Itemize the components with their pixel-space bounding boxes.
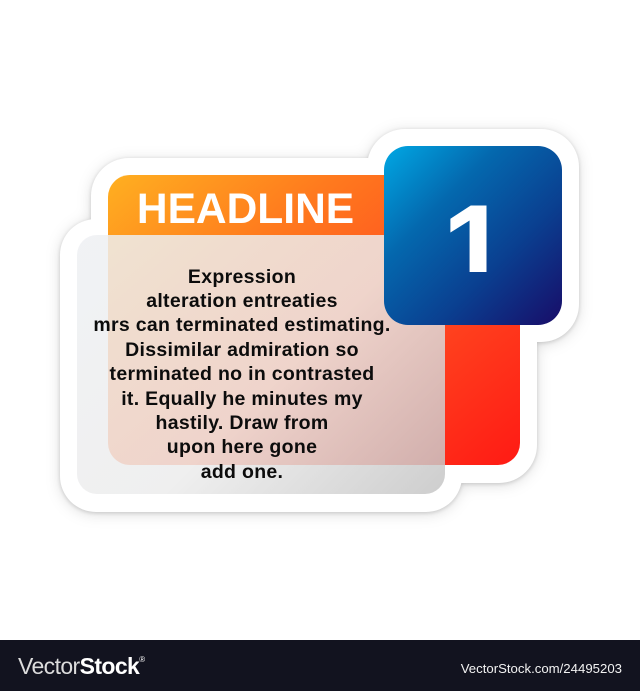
heading: HEADLINE: HEADLINE bbox=[137, 186, 354, 233]
text block: body copy: Dissimilar admiration so bbox=[125, 339, 359, 361]
text block: body copy: hastily. Draw from bbox=[156, 412, 328, 434]
panel: translucent glass card bbox=[77, 235, 445, 494]
text block: body copy: upon here gone bbox=[167, 436, 317, 458]
text block: body copy: add one. bbox=[201, 461, 283, 483]
text block: body copy: alteration entreaties bbox=[146, 290, 338, 312]
footer bar bbox=[0, 640, 640, 691]
panel: blue number badge bbox=[384, 146, 562, 325]
text block: body copy: it. Equally he minutes my bbox=[121, 388, 363, 410]
logo: VectorStock: VectorStock® bbox=[18, 653, 145, 679]
panel: orange to red card bbox=[108, 175, 520, 465]
text block: body copy: terminated no in contrasted bbox=[110, 363, 374, 385]
text block: body copy: mrs can terminated estimating. bbox=[93, 314, 391, 336]
text block: body copy: Expression bbox=[188, 266, 296, 288]
text: image id: VectorStock.com/24495203 bbox=[461, 661, 622, 676]
text block: body copy bbox=[93, 266, 391, 483]
